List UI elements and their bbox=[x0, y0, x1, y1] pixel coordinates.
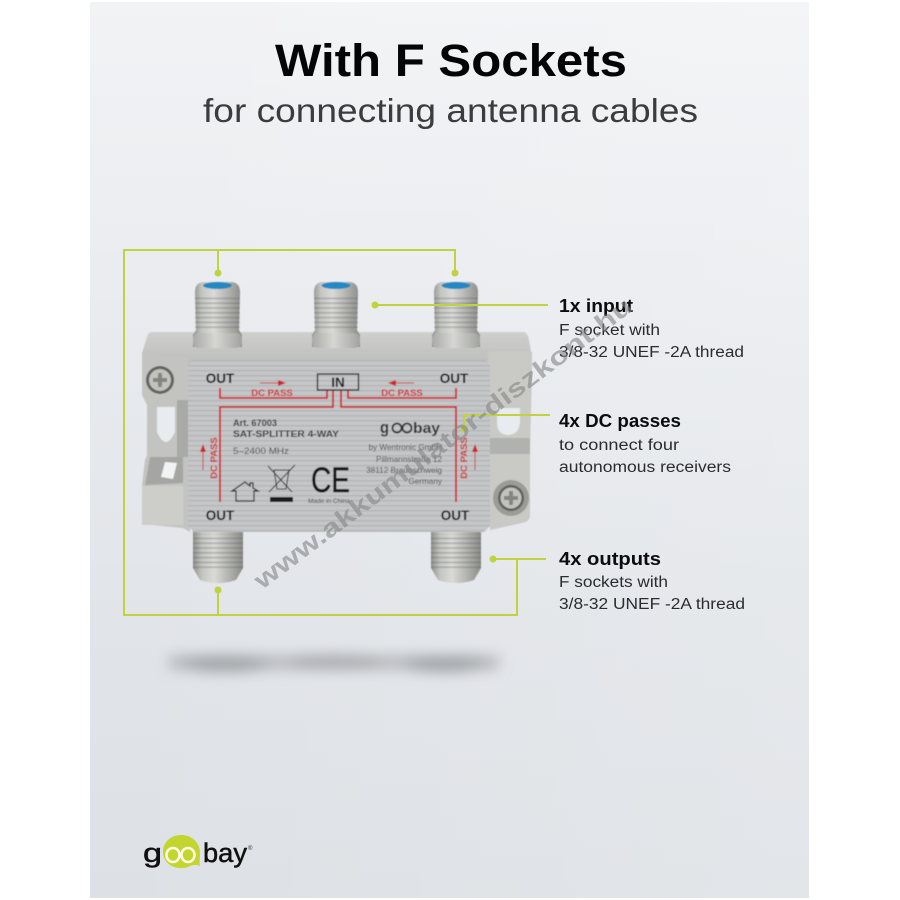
leader: outer bracket to sockets bbox=[124, 250, 546, 615]
callout: 1x input bbox=[559, 295, 744, 361]
DC PASS labels: DC PASS bbox=[209, 437, 220, 479]
callout lines: lime green leaders bbox=[124, 250, 550, 615]
left bracket lower block bbox=[142, 486, 183, 525]
OUT and IN labels: OUT bbox=[440, 371, 469, 386]
made in China: Made in China bbox=[308, 498, 350, 505]
left mounting bracket bbox=[142, 353, 190, 532]
logo rings bbox=[166, 848, 194, 862]
IN box bbox=[318, 374, 358, 390]
frequency text: 5–2400 MHz bbox=[233, 446, 289, 457]
DC PASS labels: DC PASS bbox=[381, 388, 423, 399]
product: 4-way splitter bbox=[142, 282, 532, 583]
OUT and IN labels: OUT bbox=[206, 508, 235, 523]
callout: 4x outputs: F sockets with bbox=[559, 574, 668, 591]
left bracket square hole bbox=[161, 462, 177, 479]
right bracket shaded band bbox=[490, 438, 530, 454]
subtitle: for connecting antenna cables bbox=[203, 92, 698, 129]
registered mark: ® bbox=[248, 845, 253, 852]
bottom-right F socket bbox=[431, 528, 481, 583]
goobay logo bbox=[143, 835, 253, 868]
DC PASS arrows bbox=[200, 380, 478, 470]
article text: Art. 67003 bbox=[233, 418, 277, 428]
OUT and IN labels: OUT bbox=[206, 371, 235, 386]
top-centre F socket bbox=[312, 282, 360, 348]
left screw bbox=[146, 366, 174, 394]
manufacturer address: Germany bbox=[408, 477, 443, 486]
background panel bbox=[90, 2, 809, 898]
DC PASS labels bbox=[209, 388, 470, 479]
faceplate goobay logo: g bbox=[380, 418, 389, 437]
article text bbox=[233, 418, 339, 439]
right screw bbox=[493, 480, 529, 516]
leader: input bbox=[375, 304, 548, 306]
faceplate bbox=[188, 360, 490, 532]
left bracket slot bbox=[157, 407, 175, 442]
logo letter g: g bbox=[143, 838, 162, 868]
DC PASS labels: DC PASS bbox=[459, 437, 470, 479]
icon: house bbox=[232, 482, 258, 501]
logo bubble bbox=[163, 835, 200, 868]
callout: 1x input: F socket with bbox=[559, 322, 660, 339]
logo letters bay: bay bbox=[203, 838, 247, 868]
manufacturer address: by Wentronic GmbH bbox=[368, 443, 442, 452]
manufacturer address: 38112 Braunschweig bbox=[366, 466, 442, 475]
top-left F socket bbox=[193, 282, 242, 348]
callout: 4x DC passes: to connect four bbox=[559, 437, 679, 454]
callout: 4x outputs bbox=[559, 548, 745, 613]
right bracket slot bbox=[497, 408, 520, 435]
faceplate goobay logo bbox=[380, 418, 441, 437]
callout: 4x outputs: 3/8-32 UNEF -2A thread bbox=[559, 596, 745, 613]
left bracket recess bbox=[145, 457, 183, 485]
title: With F Sockets bbox=[275, 35, 627, 86]
callout: 1x input: 3/8-32 UNEF -2A thread bbox=[559, 344, 744, 361]
leader: DC passes bbox=[464, 415, 550, 429]
manufacturer address bbox=[366, 443, 443, 486]
OUT and IN labels: OUT bbox=[441, 508, 470, 523]
top-right F socket bbox=[432, 282, 480, 348]
faceplate red DC pass wiring bbox=[220, 388, 456, 502]
callout: 4x DC passes: autonomous receivers bbox=[559, 459, 731, 476]
CE mark: CE bbox=[311, 461, 350, 500]
icon: crossed-out bin bbox=[268, 465, 295, 502]
OUT and IN labels: IN bbox=[331, 375, 345, 390]
housing top surface bbox=[142, 332, 532, 372]
watermark: www.akkumulator-diszkont.hu bbox=[248, 292, 638, 596]
callout: 1x input: 1x input bbox=[559, 295, 633, 316]
bottom-left F socket bbox=[193, 528, 243, 583]
callout: 4x DC passes bbox=[559, 410, 731, 476]
faceplate goobay logo: bay bbox=[413, 420, 441, 437]
callout dots bbox=[214, 270, 496, 594]
floor shadow of product bbox=[168, 655, 500, 672]
manufacturer address: Pillmannstraße 12 bbox=[376, 455, 442, 464]
OUT and IN labels bbox=[206, 371, 470, 523]
article text: SAT-SPLITTER 4-WAY bbox=[233, 429, 339, 439]
callout: 4x outputs: 4x outputs bbox=[559, 548, 661, 569]
callout: 4x DC passes: 4x DC passes bbox=[559, 410, 681, 431]
DC PASS labels: DC PASS bbox=[251, 388, 293, 399]
left bracket inner edge bbox=[177, 400, 188, 457]
right mounting bracket bbox=[488, 352, 532, 530]
